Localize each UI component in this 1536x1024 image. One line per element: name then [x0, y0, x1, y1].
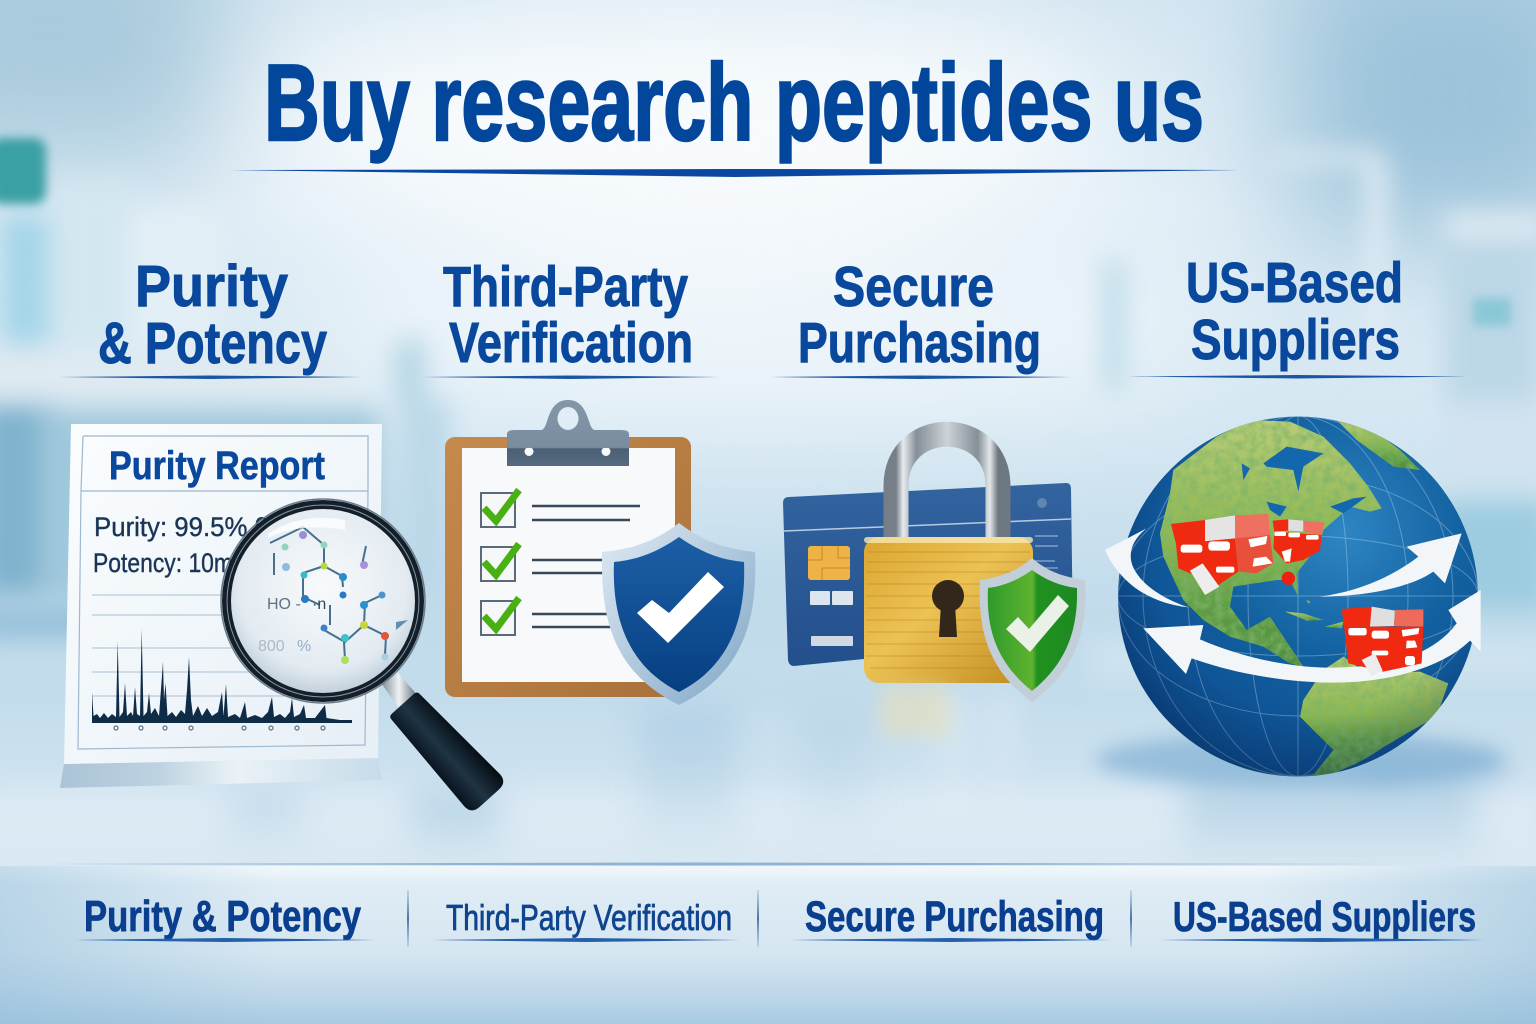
padlock body — [864, 537, 1033, 683]
heading: Purity & Potency — [60, 254, 362, 379]
footer label: Third-Party Verification: Third-Party Verification — [446, 897, 732, 938]
padlock reflection — [880, 686, 950, 736]
heading: US-Based Suppliers: US-Based — [1186, 251, 1403, 315]
report values — [93, 512, 269, 578]
globe sphere — [1118, 416, 1478, 776]
heading: Purity & Potency: & Potency — [98, 311, 327, 376]
green check shield — [980, 558, 1086, 702]
heading: Secure Purchasing: Purchasing — [798, 311, 1041, 375]
globe shadow — [1095, 732, 1505, 788]
heading: US-Based Suppliers — [1128, 251, 1467, 378]
report shadow — [60, 758, 382, 788]
panel: clipboard checklist with shield — [445, 400, 755, 705]
molecule diagram: 800 — [258, 638, 285, 655]
heading: Purity & Potency: Purity — [135, 254, 288, 319]
title — [230, 42, 1240, 177]
checklist rows — [481, 490, 640, 635]
shipping box: large — [1171, 514, 1295, 595]
shipping box: small — [1273, 519, 1324, 563]
heading: Third-Party Verification — [423, 255, 719, 379]
padlock shackle — [896, 434, 998, 540]
floor reflections — [230, 695, 1510, 865]
magnifying glass handle — [379, 668, 507, 814]
clipboard — [445, 437, 691, 697]
heading: US-Based Suppliers: Suppliers — [1191, 308, 1400, 372]
report values: Purity: 99.5% 0 — [94, 512, 269, 542]
credit card — [783, 483, 1073, 666]
chromatogram chart — [92, 595, 360, 730]
heading: Third-Party Verification: Verification — [449, 311, 693, 375]
heading: Third-Party Verification: Third-Party — [443, 255, 688, 319]
panel: globe with shipping boxes — [1095, 416, 1505, 788]
divider — [407, 890, 409, 947]
report heading: Purity Report — [109, 444, 325, 488]
footer band — [0, 862, 1536, 1024]
blue check shield — [602, 523, 755, 705]
clipboard clip — [507, 400, 629, 466]
panel: credit card and padlock — [783, 434, 1086, 736]
report sheet — [64, 424, 382, 764]
molecule diagram: % — [297, 638, 311, 655]
divider — [1130, 890, 1132, 947]
footer label: Purity & Potency: Purity & Potency — [84, 892, 361, 941]
molecule diagram: HO - — [267, 596, 301, 613]
shipping box: lower — [1342, 607, 1423, 676]
panel: purity report with magnifying glass — [60, 424, 507, 814]
heading: Secure Purchasing — [770, 255, 1072, 379]
molecule diagram — [258, 518, 408, 664]
heading: Secure Purchasing: Secure — [833, 255, 994, 319]
magnifier lens — [229, 507, 417, 695]
molecule diagram: ·n — [312, 596, 326, 613]
divider — [757, 890, 759, 947]
report values: Potency: 10m — [93, 548, 233, 578]
shipping arrows — [1105, 528, 1481, 683]
magnifier rim — [221, 499, 425, 703]
globe map — [1118, 416, 1478, 777]
footer label: Secure Purchasing: Secure Purchasing — [805, 893, 1104, 941]
